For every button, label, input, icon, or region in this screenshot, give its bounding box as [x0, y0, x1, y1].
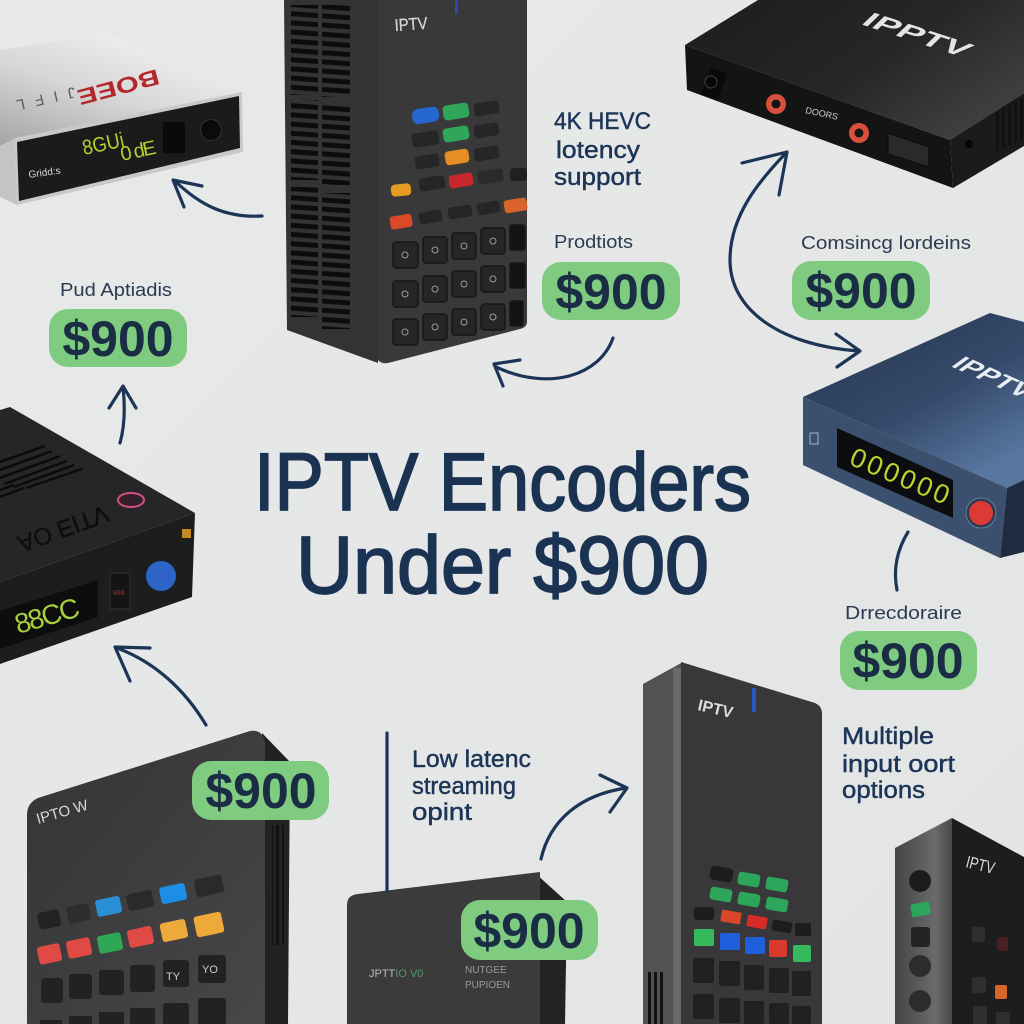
key caption: TY — [166, 971, 181, 983]
green button — [910, 901, 931, 917]
feature text: multiple input port options: options — [842, 777, 925, 804]
dial button — [909, 990, 931, 1012]
port mark — [810, 433, 818, 444]
device: blue encoder, right: 000000 — [846, 442, 954, 511]
key caption: YO — [202, 964, 218, 976]
feature text: 4K HEVC latency support: lotency — [556, 137, 640, 164]
label: Prodtiots: Prodtiots — [554, 232, 633, 252]
feature text: low latency streaming: streaming — [412, 773, 516, 800]
status LED — [455, 0, 458, 14]
device: black encoder, left: 888 — [113, 590, 125, 597]
port label: DOORS — [805, 105, 839, 122]
device: black encoder, bottom centre — [347, 872, 567, 1024]
feature text: 4K HEVC latency support: 4K HEVC — [554, 108, 651, 135]
arrow: double ended, right — [730, 152, 860, 367]
dark button — [911, 927, 930, 947]
display readout, second part: 0 dE — [118, 137, 158, 166]
price tag: right: $900 — [852, 633, 964, 689]
panel label: Gridd:s — [28, 166, 61, 181]
blue button — [146, 561, 176, 591]
arrow: to tall bottom encoder — [541, 775, 627, 859]
arrow: to tall encoder — [494, 338, 613, 386]
knob — [200, 120, 222, 140]
square key grid — [393, 225, 525, 345]
display readout: 8GUi — [80, 129, 126, 160]
logo: IPTO W — [34, 797, 91, 828]
arrow: up to left price — [109, 386, 136, 443]
vertical connector — [385, 733, 389, 892]
side jack — [965, 140, 973, 148]
coloured button rows — [36, 874, 225, 965]
switches — [888, 133, 929, 167]
green display — [0, 580, 98, 649]
side vents — [995, 97, 1024, 153]
logo: IPPTV — [945, 353, 1024, 402]
small red panel — [110, 573, 130, 609]
device: black encoder, bottom right — [895, 818, 1024, 1024]
logo: IPTV — [696, 697, 735, 722]
feature text: multiple input port options: Multiple — [842, 723, 934, 750]
top logo, grey: JIFL — [15, 83, 77, 113]
price tag: top right: $900 — [805, 263, 917, 319]
title: IPTV Encoders — [254, 437, 751, 528]
feature text: 4K HEVC latency support: support — [554, 164, 641, 191]
title — [254, 437, 751, 611]
coloured buttons — [694, 865, 811, 962]
seven segment display — [837, 428, 953, 518]
arrow stub: right — [895, 532, 908, 590]
display window — [163, 122, 185, 153]
power button — [966, 498, 996, 528]
device: blue encoder, right — [803, 313, 1024, 558]
front small buttons — [972, 927, 1010, 1024]
device: black encoder, left — [0, 407, 195, 664]
port cluster — [701, 68, 727, 100]
feature text: multiple input port options: input oort — [842, 751, 955, 778]
arrow: to left encoder — [115, 647, 206, 725]
label: Pud Aptiadis: Pud Aptiadis — [60, 280, 172, 300]
caption: PUPIOEN — [465, 980, 510, 991]
price tag: top centre: $900 — [555, 264, 667, 320]
round button — [909, 870, 931, 892]
pink badge — [118, 493, 144, 507]
top logo, red: BOEE — [75, 64, 162, 110]
label: Comsincg lordeins: Comsincg lordeins — [801, 233, 971, 253]
device: silver encoder, top left — [0, 33, 243, 205]
key grid — [693, 958, 811, 1024]
logo: IPPTV — [856, 9, 979, 61]
logo: JPTTIO V0 — [369, 968, 423, 980]
top logo: VTIƎ OA — [14, 499, 112, 557]
amber mark — [182, 529, 191, 538]
device: black encoder, left: 88CC — [11, 592, 83, 640]
price tag: bottom left: $900 — [205, 763, 317, 819]
dial button — [909, 955, 931, 977]
coloured button rows — [389, 100, 528, 230]
label: Drrecdoraire: Drrecdoraire — [845, 603, 962, 623]
feature text: low latency streaming: opint — [412, 799, 472, 826]
logo: IPTV — [394, 14, 429, 35]
red connector left — [766, 94, 786, 114]
side vents — [291, 5, 350, 329]
device: black encoder, bottom left — [27, 731, 290, 1024]
side slots — [272, 825, 284, 945]
arrow: to silver encoder — [173, 180, 262, 216]
device: black encoder, top right — [685, 0, 1024, 188]
price tag: left: $900 — [62, 311, 174, 367]
logo: IPTV — [964, 852, 997, 878]
key rows — [40, 955, 226, 1024]
feature text: multiple input port options — [842, 723, 955, 804]
feature text: low latency streaming — [412, 746, 531, 826]
device: tall black encoder, bottom centre right — [643, 662, 822, 1024]
blue LED — [752, 688, 756, 712]
price tag: bottom centre: $900 — [473, 903, 585, 959]
device: tall black encoder, top centre — [284, 0, 528, 363]
red connector right — [849, 123, 869, 143]
caption: NUTGEE — [465, 965, 507, 976]
side vent — [647, 972, 664, 1024]
top vents — [0, 446, 82, 497]
feature text: low latency streaming: Low latenc — [412, 746, 531, 773]
title: Under $900 — [296, 520, 709, 611]
feature text: 4K HEVC latency support — [554, 108, 651, 191]
